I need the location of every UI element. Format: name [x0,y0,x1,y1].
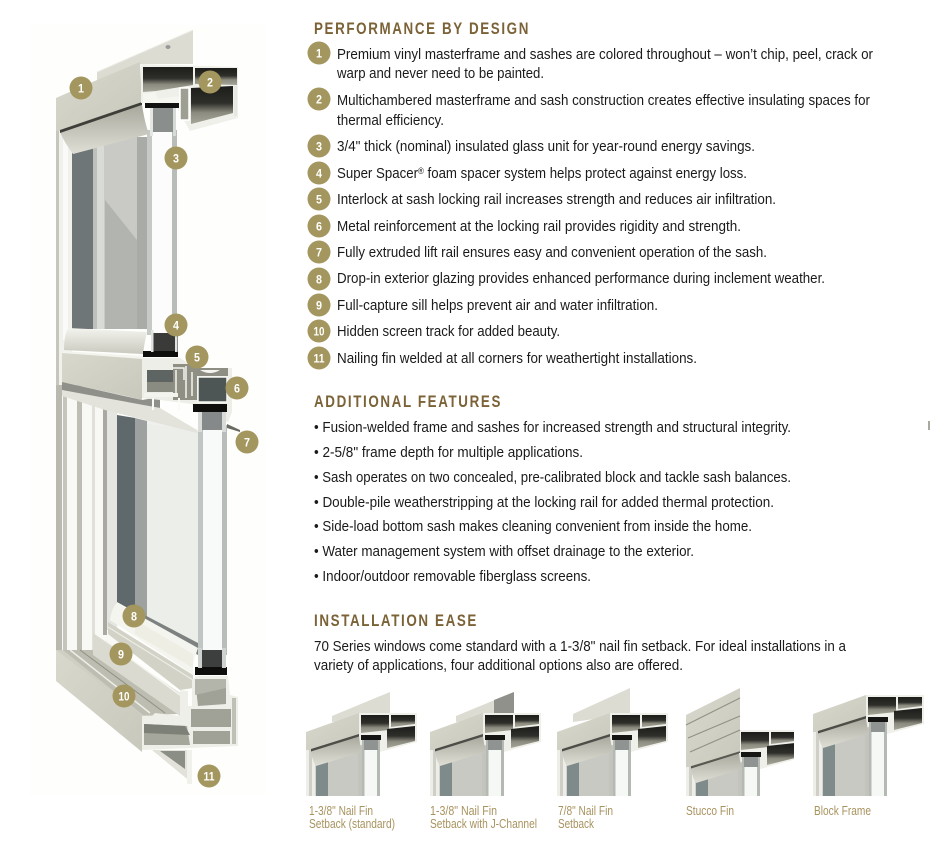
item 5: 5 [316,192,322,206]
item 1 [308,42,873,82]
item 10: Hidden screen track for added beauty. [337,323,560,340]
text: installation intro: 70 Series windows come standard with a 1-3/8" nail fin setback. For ideal installations in a [314,638,847,655]
sill [56,603,198,752]
caption: Stucco Fin [686,804,734,818]
panel: frame option 2 J-channel [430,692,541,831]
panel: main window cutaway [30,25,265,795]
item 1: warp and never need to be painted. [336,65,544,82]
callout badges on window: 10 [118,690,130,704]
callout badges on window: 11 [204,770,215,784]
item 2: thermal efficiency. [337,112,444,129]
item 6: 6 [316,220,322,234]
caption: Block Frame [814,804,871,818]
item 9 [308,294,658,316]
item 7 [308,240,767,264]
callout badges on window: 9 [118,648,124,662]
list: additional features: • Side-load bottom sash makes cleaning convenient from inside the home. [314,518,752,535]
item 5 [308,188,776,210]
item 8: 8 [316,272,322,286]
upper sash glass [72,130,177,335]
callout badges on window [70,70,258,788]
caption: 1-3/8" Nail Fin [309,804,373,818]
panel: frame option 4 stucco fin [686,688,797,839]
left frame upper [56,98,72,398]
callout badges on window: 3 [173,152,179,166]
item 4: Super Spacer [337,165,429,182]
item 8 [308,268,825,290]
callout badges on window: 5 [194,350,200,364]
flange [573,688,630,722]
item 9: Full-capture sill helps prevent air and water infiltration. [337,297,658,314]
lower sash glass [56,385,227,660]
text: installation intro [314,638,847,674]
item 3: 3/4" thick (nominal) insulated glass unit for year-round energy savings. [337,138,755,155]
item 6 [308,214,741,238]
page edge mark [928,421,930,430]
heading: installation ease: INSTALLATION EASE [314,612,478,630]
section: meeting rail profiles [142,358,240,432]
caption [430,804,537,831]
item 4: foam spacer system helps protect against energy loss. [424,165,747,182]
meeting rail upper sash [62,328,197,433]
caption: Setback [558,817,595,831]
caption [309,804,395,831]
header groove [60,102,142,133]
callout badges on window: 1 [78,82,84,96]
callout badges on window: 2 [207,76,213,90]
item 10: 10 [314,324,325,338]
item 11: 11 [314,352,325,366]
item 11: Nailing fin welded at all corners for weathertight installations. [337,350,697,367]
panel: frame option 5 block frame [813,695,924,818]
item 10 [308,320,560,342]
panel: frame option 3 seven-eighths [557,688,668,831]
caption: 1-3/8" Nail Fin [430,804,497,818]
item 11 [308,346,697,370]
stucco fin [686,688,740,767]
background haze of window image [30,25,265,795]
caption: Setback with J-Channel [430,817,537,831]
list: additional features: • Sash operates on two concealed, pre-calibrated block and tackle sash balances. [314,469,791,486]
list: additional features [314,419,791,585]
list: additional features: • Water management system with offset drainage to the exterior. [314,543,694,560]
panel: frame option 1 standard [306,692,417,831]
item 7: Fully extruded lift rail ensures easy and convenient operation of the sash. [337,244,767,261]
heading: performance by design: PERFORMANCE BY DESIGN [314,20,530,38]
j-channel [494,692,514,713]
item 9: 9 [316,298,322,312]
nailing fin top [97,30,193,82]
item 5: Interlock at sash locking rail increases strength and reduces air infiltration. [337,191,776,208]
profile [813,695,924,796]
section: sill profiles [142,648,238,784]
caption [558,804,613,831]
list: performance features [308,42,873,370]
header face [56,62,142,131]
list: additional features: • Double-pile weatherstripping at the locking rail for added thermal protection. [314,494,774,511]
item 2: Multichambered masterframe and sash construction creates effective insulating spaces for [337,92,870,109]
callout badges on window: 6 [234,382,240,396]
list: additional features: • Fusion-welded frame and sashes for increased strength and structural integrity. [314,419,791,436]
item 3 [308,134,755,158]
item 1: 1 [316,46,322,60]
profile [686,730,794,796]
item 8: Drop-in exterior glazing provides enhanced performance during inclement weather. [337,270,825,287]
flange [332,692,390,722]
item 3: 3 [316,140,322,154]
text: installation intro: variety of applications, four additional options also are offered. [314,657,683,674]
heading: additional features: ADDITIONAL FEATURES [314,393,502,411]
profile [430,713,541,796]
item 7: 7 [316,246,322,260]
list: additional features: • 2-5/8" frame depth for multiple applications. [314,444,583,461]
flange [456,692,514,722]
callout badges on window: 7 [244,436,250,450]
item 6: Metal reinforcement at the locking rail provides rigidity and strength. [337,218,741,235]
item 4: 4 [316,166,322,180]
item 2 [308,88,870,129]
callout badges on window: 4 [173,318,179,332]
list: additional features: • Indoor/outdoor removable fiberglass screens. [314,568,591,585]
profile [557,713,668,796]
header sash curve [60,105,149,154]
profile [306,713,417,796]
item 4 [308,162,747,184]
section: head of frame [141,64,238,136]
caption: 7/8" Nail Fin [558,804,613,818]
caption: Setback (standard) [309,817,395,831]
item 2: 2 [316,92,322,106]
item 4: ® [418,166,424,176]
callout badges on window: 8 [131,610,137,624]
item 1: Premium vinyl masterframe and sashes are colored throughout – won’t chip, peel, crack or [337,46,873,63]
